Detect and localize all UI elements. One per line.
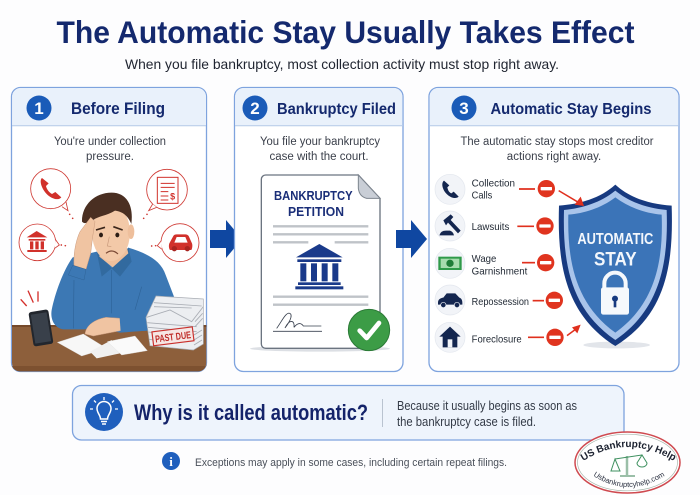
list item: wage garnishment bbox=[435, 248, 554, 278]
panel header: step 2 bbox=[235, 88, 403, 126]
list item: lawsuits: Lawsuits bbox=[472, 222, 509, 233]
illustration: stressed man at desk: PAST DUE bbox=[155, 330, 192, 345]
list item: foreclosure bbox=[435, 322, 581, 352]
panel text: file with court: You file your bankruptcy bbox=[260, 136, 380, 148]
list item: collection calls: Collection bbox=[472, 179, 515, 190]
shield bbox=[559, 185, 672, 348]
thought bubble: bill: $ bbox=[170, 191, 175, 201]
illustration: petition document: BANKRUPTCY bbox=[274, 188, 353, 203]
panel: bankruptcy filed bbox=[234, 88, 403, 372]
panel header: step 2: Bankruptcy Filed bbox=[277, 101, 396, 118]
arrow: step 1 to step 2 bbox=[210, 220, 242, 258]
thought bubble: car bbox=[151, 224, 199, 262]
panel text: collection pressure: pressure. bbox=[86, 151, 134, 163]
list item: collection calls bbox=[435, 174, 584, 206]
logo: US Bankruptcy Help: US Bankruptcy Help bbox=[580, 440, 676, 461]
phone bbox=[28, 309, 54, 347]
illustration: stressed man at desk bbox=[12, 169, 206, 371]
shield: STAY bbox=[594, 249, 637, 270]
shield: AUTOMATIC bbox=[577, 231, 654, 248]
panel: automatic stay begins bbox=[429, 88, 679, 372]
icon: light bulb bbox=[85, 393, 123, 431]
panel: before filing bbox=[12, 88, 206, 372]
illustration: petition document: PETITION bbox=[288, 204, 344, 219]
past due stack bbox=[146, 296, 203, 350]
icon: info bbox=[162, 452, 180, 470]
panel text: collection pressure: You're under collection bbox=[54, 136, 166, 148]
thought bubble: bill bbox=[143, 169, 187, 219]
panel header: step 3: 3 bbox=[459, 99, 469, 118]
signature bbox=[273, 313, 322, 331]
papers bbox=[57, 334, 107, 356]
panel header: step 1: Before Filing bbox=[71, 100, 165, 118]
arrow: step 2 to step 3 bbox=[396, 220, 427, 258]
head bbox=[92, 204, 130, 261]
callout text: the bankruptcy case is filed. bbox=[397, 415, 536, 429]
thought bubble: phone bbox=[31, 169, 73, 219]
panel text: file with court: case with the court. bbox=[269, 151, 369, 163]
panel text: stops creditor actions: The automatic stay stops most creditor bbox=[460, 136, 654, 148]
lower hand bbox=[85, 317, 122, 336]
list item: collection calls: Calls bbox=[472, 191, 492, 202]
list item: repossession bbox=[435, 285, 563, 315]
panel header: step 3 bbox=[430, 88, 678, 126]
icon: info: i bbox=[169, 454, 173, 469]
arm and hand bbox=[74, 217, 95, 269]
thought bubble: courthouse bbox=[19, 224, 66, 261]
title: The Automatic Stay Usually Takes Effect bbox=[56, 14, 635, 50]
panel header: step 1 bbox=[12, 88, 206, 126]
list item: wage garnishment: Garnishment bbox=[472, 266, 527, 277]
face details bbox=[99, 233, 103, 237]
panel text: stops creditor actions: actions right away. bbox=[507, 151, 601, 163]
icon: courthouse bbox=[295, 244, 343, 289]
subtitle: When you file bankruptcy, most collection activity must stop right away. bbox=[125, 56, 559, 72]
footnote: Exceptions may apply in some cases, including certain repeat filings. bbox=[195, 457, 507, 469]
panel header: step 1: 1 bbox=[34, 99, 44, 118]
panel header: step 2: 2 bbox=[250, 99, 260, 118]
shirt bbox=[51, 248, 174, 333]
neck bbox=[99, 247, 128, 267]
callout text: Because it usually begins as soon as bbox=[397, 399, 577, 413]
list item: foreclosure: Foreclosure bbox=[472, 334, 522, 345]
panel header: step 3: Automatic Stay Begins bbox=[490, 101, 652, 118]
hair bbox=[82, 193, 132, 224]
icon: green check bbox=[348, 309, 390, 351]
callout: why is it called automatic bbox=[72, 386, 624, 440]
illustration: petition document bbox=[250, 175, 390, 352]
callout heading: Why is it called automatic? bbox=[134, 400, 368, 425]
list item: wage garnishment: Wage bbox=[472, 254, 497, 265]
logo: US Bankruptcy Help bbox=[574, 431, 681, 494]
logo: US Bankruptcy Help: Usbankruptcyhelp.com bbox=[594, 472, 664, 488]
list item: repossession: Repossession bbox=[472, 297, 529, 308]
desk bbox=[12, 325, 206, 371]
list item: lawsuits bbox=[435, 211, 554, 241]
